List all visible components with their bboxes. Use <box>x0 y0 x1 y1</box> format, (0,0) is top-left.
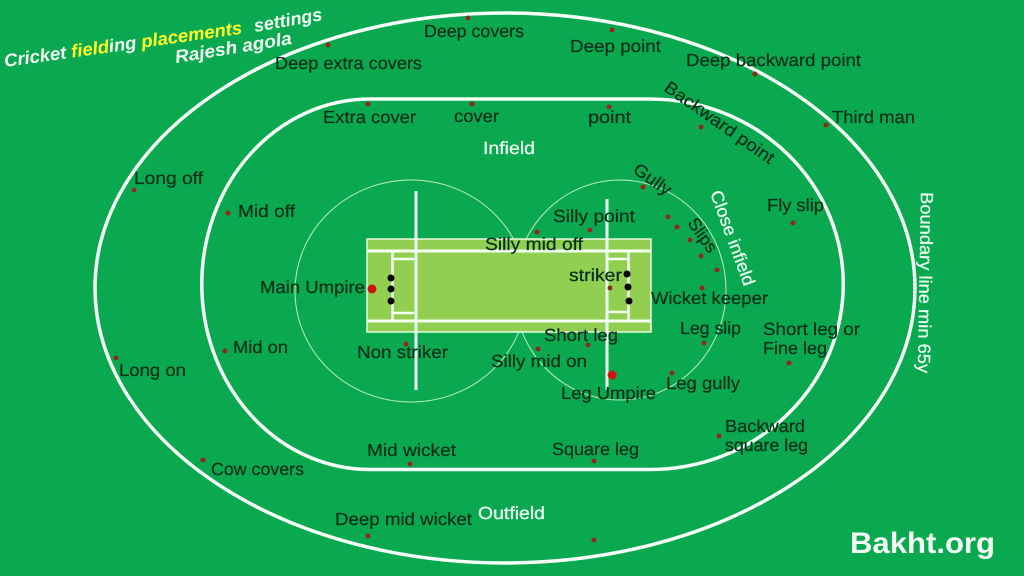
title: settings <box>252 4 324 36</box>
stumps: non striker end <box>388 274 394 304</box>
fielding position labels: Silly mid off <box>485 234 583 254</box>
fielding position labels <box>119 21 915 529</box>
fielding position labels: Mid wicket <box>367 440 456 460</box>
fielding position labels: cover <box>454 106 499 126</box>
fielding position labels: Long off <box>134 168 203 188</box>
fielding position labels: point <box>588 107 631 127</box>
fielding position labels: Leg slip <box>680 318 741 338</box>
fielding position labels: Non striker <box>357 342 448 362</box>
fielding position labels: Backward <box>725 416 805 436</box>
fielding position labels: Cow covers <box>211 459 304 479</box>
title: Rajesh agola <box>173 28 293 67</box>
fielding position labels: Short leg <box>544 325 618 345</box>
fielding position labels: Deep point <box>570 36 661 56</box>
fielding position labels: Fly slip <box>767 195 824 215</box>
fielding position labels: Short leg or <box>763 319 860 339</box>
fielding position labels: Leg Umpire <box>561 383 656 403</box>
fielding position labels: Deep backward point <box>686 50 861 70</box>
infield line <box>202 99 843 470</box>
title <box>3 4 324 71</box>
fielder position dots <box>114 16 828 542</box>
boundary line <box>95 13 915 563</box>
close infield circles <box>295 180 726 402</box>
fielding position labels: Deep covers <box>424 21 524 41</box>
fielding position labels: Fine leg <box>763 338 827 358</box>
fielding position labels: Extra cover <box>323 107 416 127</box>
fielding position labels: square leg <box>725 435 808 455</box>
title: Cricket fielding placements <box>3 18 243 71</box>
fielding position labels: Silly point <box>553 206 635 226</box>
fielding position labels: Third man <box>832 107 915 127</box>
fielding position labels: Leg gully <box>666 373 740 393</box>
fielding position labels: Slips <box>684 214 722 257</box>
fielding position labels: Deep extra covers <box>275 53 422 73</box>
fielding position labels: Square leg <box>552 439 639 459</box>
fielding position labels: Backward point <box>661 77 779 168</box>
field zone labels: Boundary line min 65y <box>914 192 937 374</box>
field zone labels: Infield <box>483 138 535 158</box>
umpire markers <box>368 284 616 380</box>
field zone labels: Close infield <box>706 188 759 288</box>
fielding position labels: Mid on <box>233 337 288 357</box>
fielding position labels: Gully <box>630 159 676 200</box>
fielding position labels: striker <box>569 265 622 285</box>
site credit: Bakht.org <box>850 527 995 560</box>
field zone labels: Outfield <box>478 503 545 523</box>
field zone labels <box>478 138 937 523</box>
fielding position labels: Mid off <box>238 201 295 221</box>
pitch <box>367 191 651 390</box>
fielding position labels: Main Umpire <box>260 277 365 297</box>
fielding position labels: Deep mid wicket <box>335 509 472 529</box>
fielding position labels: Silly mid on <box>491 351 587 371</box>
fielding position labels: Long on <box>119 360 186 380</box>
stumps: striker end <box>624 270 632 304</box>
fielding position labels: Wicket keeper <box>651 288 768 308</box>
